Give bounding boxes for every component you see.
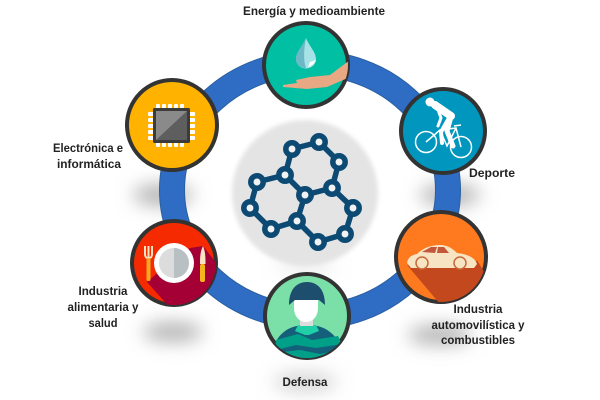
label: food and health: Industria — [78, 286, 128, 298]
icon: microchip — [127, 80, 217, 170]
label: food and health: salud — [88, 318, 118, 330]
label: food and health — [68, 286, 139, 330]
label: electronics — [53, 143, 123, 171]
label: electronics: informática — [57, 159, 122, 171]
center disc — [232, 120, 378, 266]
icon: plate and cutlery — [132, 221, 218, 310]
icon: soldier — [265, 274, 349, 360]
label: automotive — [432, 304, 525, 347]
icon: cyclist — [401, 89, 485, 173]
molecule icon — [244, 136, 359, 248]
ring — [172, 63, 448, 317]
label: food and health: alimentaria y — [68, 302, 139, 314]
infographic — [54, 6, 524, 398]
label: energy: Energía y medioambiente — [243, 6, 385, 18]
label: sport: Deporte — [469, 168, 515, 180]
icon: car — [396, 212, 490, 304]
label: electronics: Electrónica e — [53, 143, 123, 155]
soft drop shadows — [133, 184, 480, 391]
label: automotive: combustibles — [441, 335, 515, 347]
label: automotive: Industria — [454, 304, 503, 316]
label: defence: Defensa — [282, 377, 328, 389]
icon: water drop and hand — [264, 23, 350, 107]
label: automotive: automovilística y — [432, 320, 525, 332]
